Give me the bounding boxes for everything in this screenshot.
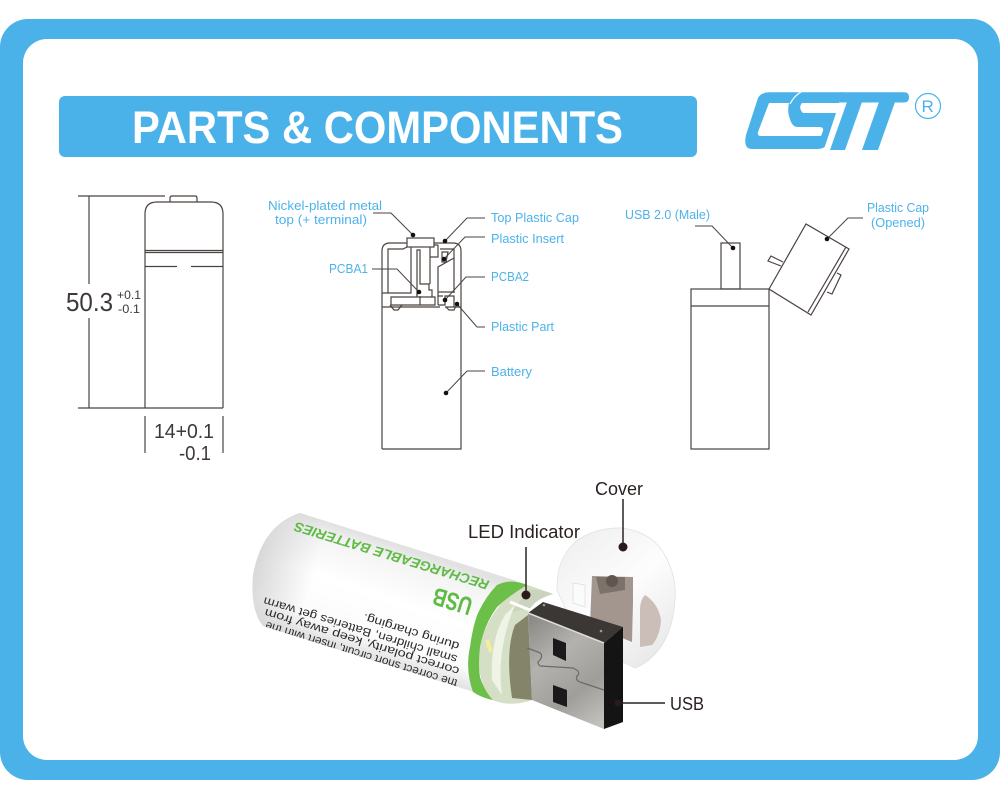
callout: cover [595, 479, 643, 552]
callout: cover: Cover [595, 479, 643, 499]
label: top plastic cap: Top Plastic Cap [491, 210, 579, 225]
label: plastic insert [442, 231, 564, 261]
label: USB 2.0 male [625, 207, 735, 250]
label: PCBA2 [443, 269, 529, 302]
callout: USB [614, 694, 704, 714]
label: battery [444, 364, 532, 395]
height dimension: -0.1 [118, 304, 140, 316]
label: plastic part: Plastic Part [491, 319, 554, 334]
label: plastic cap opened: (Opened) [871, 215, 925, 230]
height dimension [66, 287, 141, 317]
label: plastic part [455, 302, 554, 334]
label: PCBA1: PCBA1 [329, 261, 368, 276]
battery body and USB plug [691, 243, 769, 449]
height dimension: 50.3 [66, 287, 113, 317]
battery label printed text: small children, Batteries get warm [262, 594, 459, 665]
battery outline with dimensions [78, 196, 223, 453]
title banner [59, 96, 697, 157]
label: nickel-plated metal top: top (+ terminal) [275, 212, 367, 227]
label: plastic cap opened: Plastic Cap [867, 200, 929, 215]
cutaway diagram [268, 198, 579, 449]
green band [468, 582, 527, 700]
dimension drawing [66, 196, 223, 465]
label: PCBA2: PCBA2 [491, 269, 529, 284]
transparent cap section [478, 584, 553, 704]
height dimension: +0.1 [117, 290, 141, 302]
battery label printed text: USB [429, 582, 476, 620]
battery body [252, 513, 517, 692]
label: USB 2.0 male: USB 2.0 (Male) [625, 207, 710, 222]
opened cap diagram [625, 200, 929, 449]
callout: LED indicator: LED Indicator [468, 522, 580, 542]
callout: USB: USB [670, 694, 704, 714]
USB plug [527, 602, 623, 729]
label: PCBA1 [329, 261, 421, 294]
battery label printed text: correct polarity, keep away from [263, 606, 461, 677]
label: top plastic cap [443, 210, 579, 243]
battery label printed text: the correct short circuit, insert with the [264, 619, 459, 689]
logo: CSTT: R [922, 97, 934, 116]
opened plastic cap [768, 224, 849, 315]
logo: CSTT [745, 92, 940, 150]
label: battery: Battery [491, 364, 532, 379]
battery label printed text: during charging. [362, 611, 461, 652]
product photo illustration [252, 479, 704, 729]
battery label printed text: RECHARGEABLE BATTERIES [292, 519, 491, 592]
width dimension: 14+0.1 [154, 421, 214, 443]
label: plastic cap opened [825, 200, 929, 241]
width dimension [154, 421, 214, 465]
battery label printed text [262, 519, 491, 689]
label: nickel-plated metal top [268, 198, 415, 237]
title banner: PARTS & COMPONENTS [132, 102, 623, 153]
callout: LED indicator [468, 522, 580, 600]
cover [557, 528, 675, 668]
cutaway drawing [382, 238, 461, 449]
label: nickel-plated metal top: Nickel-plated metal [268, 198, 382, 213]
label: plastic insert: Plastic Insert [491, 231, 564, 246]
width dimension: -0.1 [179, 443, 211, 465]
